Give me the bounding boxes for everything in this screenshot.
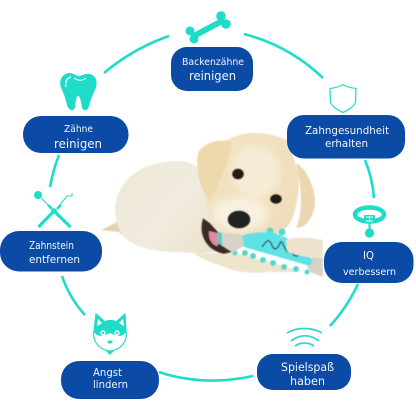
label: Spielspaß haben bbox=[257, 354, 351, 390]
label: Zähne reinigen bbox=[23, 116, 128, 153]
right eye bbox=[270, 194, 282, 204]
label: Zahngesundheit erhalten: erhalten bbox=[325, 137, 368, 150]
toy squiggle bbox=[262, 241, 300, 256]
puppy right ear bbox=[296, 163, 315, 228]
front leg and paw bbox=[190, 250, 300, 273]
puppy left ear bbox=[197, 141, 232, 199]
left eye bbox=[232, 168, 244, 180]
label: IQ verbessern: verbessern bbox=[343, 267, 396, 278]
label: Spielspaß haben: haben bbox=[290, 374, 325, 388]
icon: shiba dog face bbox=[94, 314, 126, 355]
label: Angst lindern: lindern bbox=[93, 378, 128, 391]
label: Backenzähne reinigen: Backenzähne bbox=[182, 57, 244, 68]
icon: wifi waves bbox=[287, 328, 322, 346]
label: IQ verbessern: IQ bbox=[363, 249, 374, 262]
label: Zahnstein entfernen: Zahnstein bbox=[29, 240, 74, 252]
label: Backenzähne reinigen bbox=[171, 47, 253, 91]
label: Backenzähne reinigen: reinigen bbox=[189, 69, 236, 83]
label: Zahnstein entfernen: entfernen bbox=[29, 253, 80, 266]
label: Zähne reinigen: Zähne bbox=[64, 124, 93, 135]
puppy tail bbox=[101, 218, 128, 240]
label: Angst lindern: Angst bbox=[93, 366, 123, 379]
label: IQ verbessern bbox=[324, 242, 414, 283]
chew toy teal spikes bbox=[232, 228, 310, 274]
nose bbox=[228, 210, 250, 228]
paw on toy bbox=[286, 238, 323, 257]
tongue bbox=[209, 231, 218, 246]
chew toy handle bbox=[218, 232, 244, 252]
label: Zahngesundheit erhalten bbox=[287, 115, 405, 158]
label: Zahngesundheit erhalten: Zahngesundheit bbox=[305, 124, 390, 137]
puppy chewing toy photo bbox=[101, 133, 323, 277]
label: Angst lindern bbox=[61, 361, 159, 399]
label: Zahnstein entfernen bbox=[0, 231, 102, 272]
label: Zähne reinigen: reinigen bbox=[54, 137, 102, 151]
icon: dog collar bbox=[355, 208, 384, 238]
label: Spielspaß haben: Spielspaß bbox=[281, 360, 334, 374]
puppy head bbox=[204, 133, 299, 237]
mouth bbox=[201, 218, 232, 254]
circular connector ring bbox=[50, 34, 374, 381]
chew toy blue section bbox=[242, 232, 313, 266]
icon: shield bbox=[330, 84, 356, 112]
icon: bone bbox=[186, 11, 231, 43]
forehead highlight bbox=[232, 146, 280, 198]
icon: dental tools bbox=[34, 191, 72, 227]
puppy body bbox=[115, 161, 236, 253]
toy teal collar bbox=[218, 232, 222, 246]
icon: tooth bbox=[60, 73, 97, 110]
muzzle bbox=[212, 197, 268, 231]
